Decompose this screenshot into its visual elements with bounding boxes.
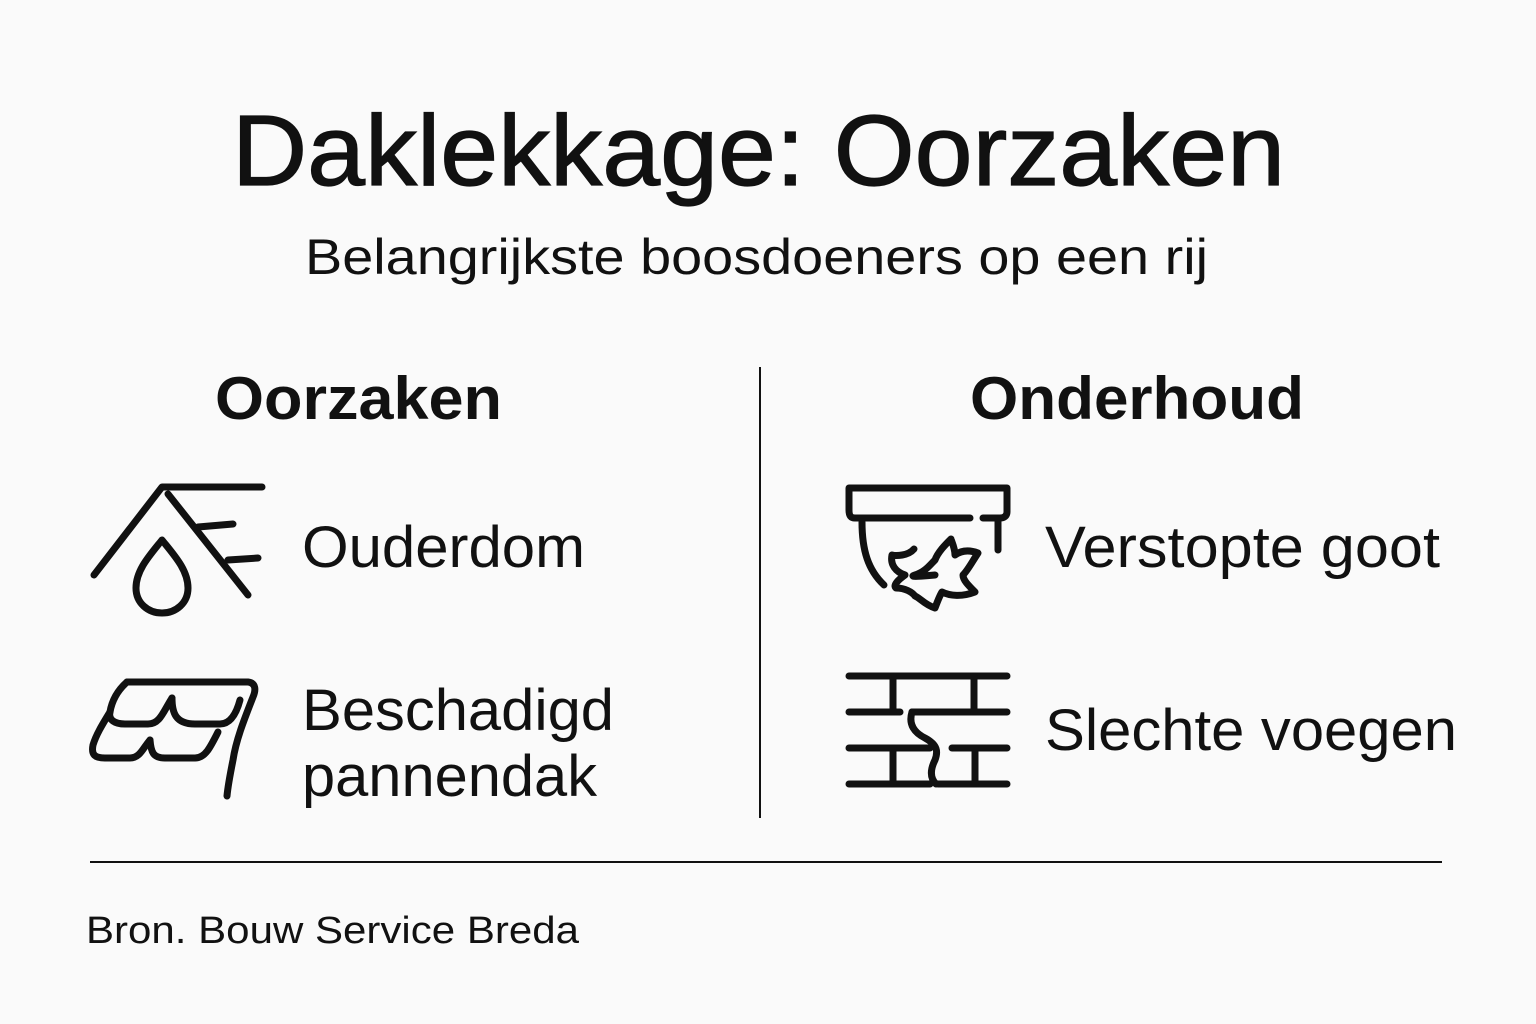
vertical divider bbox=[759, 367, 761, 818]
icon: clogged gutter with leaf bbox=[849, 488, 1007, 608]
icon: roof with drop bbox=[94, 487, 262, 613]
text: Ouderdom: Ouderdom bbox=[302, 515, 585, 580]
heading: Onderhoud: Onderhoud bbox=[970, 365, 1304, 432]
text: Verstopte goot: Verstopte goot bbox=[1045, 515, 1440, 580]
icon: bad mortar joints bbox=[849, 676, 1007, 784]
heading: Oorzaken: Oorzaken bbox=[215, 365, 502, 432]
horizontal divider bbox=[90, 861, 1442, 863]
text: Slechte voegen: Slechte voegen bbox=[1045, 698, 1457, 763]
title: Daklekkage: Oorzaken bbox=[232, 95, 1285, 207]
text: Beschadigd pannendak: pannendak bbox=[302, 744, 598, 809]
text: Beschadigd pannendak bbox=[302, 678, 614, 809]
footer: source: Bron. Bouw Service Breda bbox=[86, 910, 580, 952]
icon: damaged roof tiles bbox=[92, 682, 255, 796]
subtitle: Belangrijkste boosdoeners op een rij bbox=[305, 229, 1208, 285]
text: Beschadigd pannendak: Beschadigd bbox=[302, 678, 614, 743]
